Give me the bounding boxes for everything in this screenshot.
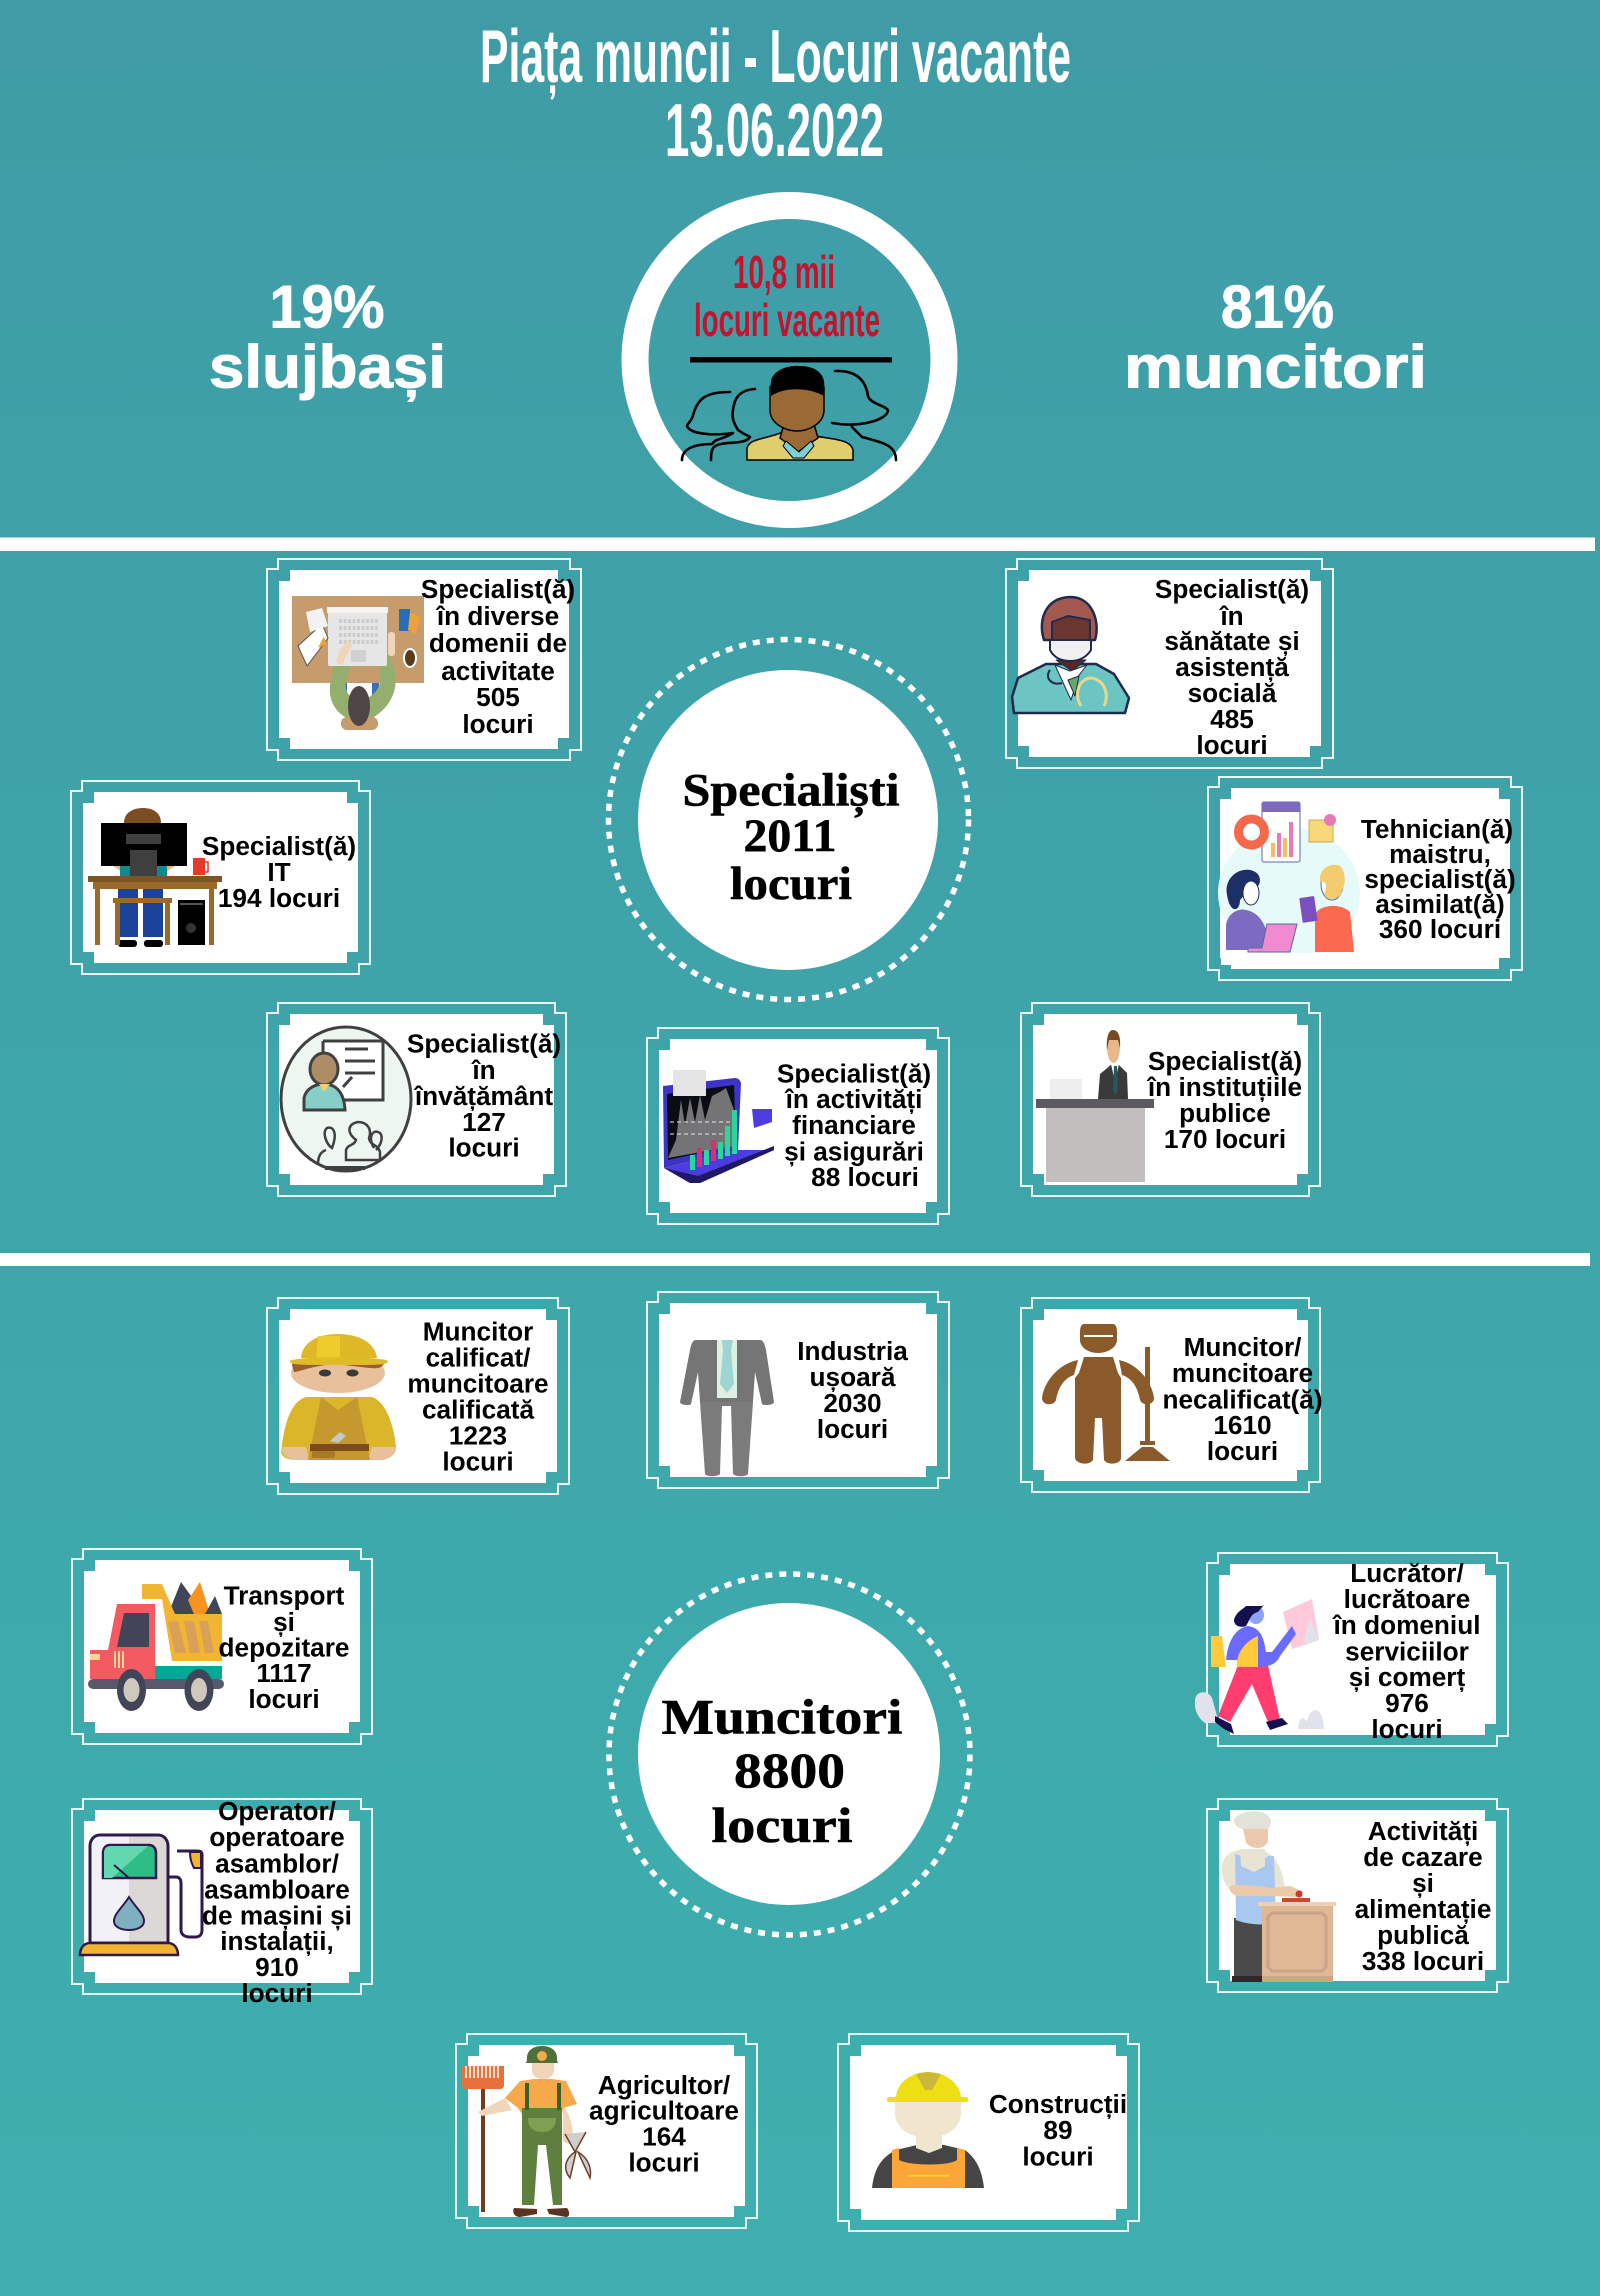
icon: farmer with rake	[462, 2046, 590, 2217]
card: specialist health	[1006, 559, 1333, 768]
label: socială	[1188, 678, 1277, 708]
card: specialist IT	[71, 781, 370, 974]
icon: person at desk from above	[292, 596, 424, 730]
label: alimentație	[1355, 1894, 1491, 1924]
label: în	[470, 1055, 496, 1085]
label: maistru,	[1389, 839, 1491, 869]
icon: chef at counter	[1221, 1811, 1336, 1982]
label: Specialist(ă)	[202, 831, 356, 861]
card: services and commerce	[1195, 1553, 1508, 1746]
label: muncitoare	[1172, 1358, 1313, 1388]
card: specialist education	[267, 1003, 566, 1196]
label: specialist(ă)	[1364, 864, 1516, 894]
label: 88 locuri	[811, 1162, 919, 1192]
label: 505	[476, 682, 520, 712]
stat: 19% slujbași: 19%	[270, 274, 384, 340]
label: Specialist(ă)	[1155, 574, 1309, 604]
specialists total text	[682, 764, 900, 910]
label: sănătate și	[1164, 626, 1300, 656]
label: 1117	[256, 1658, 312, 1688]
icon: walking woman with documents	[1195, 1599, 1324, 1734]
label: Operator/	[218, 1796, 337, 1826]
workers total text: 8800	[734, 1742, 845, 1798]
label: 127	[462, 1107, 506, 1137]
label: și comerț	[1349, 1662, 1465, 1692]
stat: 19% slujbași	[209, 274, 446, 402]
label: activitate	[441, 656, 555, 686]
label: domenii de	[429, 628, 567, 658]
label: Specialist(ă)	[421, 574, 575, 604]
label: calificat/	[426, 1342, 531, 1372]
label: Lucrător/	[1350, 1558, 1464, 1588]
panel: workers circle	[609, 1574, 970, 1935]
title: Piața muncii - Locuri vacante	[480, 14, 1071, 99]
label: locuri	[248, 1684, 320, 1714]
stat: 81% muncitori	[1124, 274, 1427, 400]
label: 976	[1385, 1688, 1429, 1718]
label: locuri	[1371, 1714, 1443, 1744]
icon: clerk at counter	[1036, 1030, 1154, 1182]
icon: grey suit	[680, 1340, 774, 1476]
total vacancies text: 10,8 mii	[733, 246, 835, 298]
card: agriculture	[456, 2034, 757, 2228]
divider: top section	[0, 538, 1595, 551]
icon: dump truck	[88, 1582, 224, 1711]
specialists total text: 2011	[744, 810, 836, 862]
label: instalații,	[220, 1926, 334, 1956]
stat: 81% muncitori: 81%	[1221, 274, 1334, 340]
icon: fuel pump	[80, 1835, 202, 1955]
label: necalificat(ă)	[1162, 1384, 1323, 1414]
card: machine operators	[72, 1796, 372, 2008]
label: Activități	[1368, 1816, 1478, 1846]
label: 2030	[823, 1388, 882, 1418]
workers total text: Muncitori	[662, 1688, 903, 1744]
label: locuri	[241, 1978, 313, 2008]
label: 1610	[1213, 1410, 1272, 1440]
label: Construcții	[989, 2089, 1127, 2119]
label: 338 locuri	[1362, 1946, 1484, 1976]
total vacancies text: locuri vacante	[694, 294, 880, 346]
label: 164	[642, 2122, 686, 2152]
label: serviciilor	[1345, 1636, 1469, 1666]
icon: group of people	[682, 366, 896, 460]
card: construction	[838, 2034, 1139, 2231]
card: unskilled worker	[1021, 1298, 1323, 1492]
label: și asigurări	[784, 1136, 924, 1166]
label: ușoară	[810, 1362, 896, 1392]
card: specialist finance	[647, 1028, 949, 1224]
label: asambloare	[204, 1874, 350, 1904]
label: lucrătoare	[1344, 1584, 1470, 1614]
icon: doctor with mask	[1012, 597, 1129, 713]
icon: teacher in circle	[281, 1027, 411, 1171]
label: 170 locuri	[1164, 1124, 1286, 1154]
label: Specialist(ă)	[1148, 1046, 1302, 1076]
icon: laptop with charts	[663, 1070, 774, 1183]
label: și	[273, 1607, 295, 1637]
label: locuri	[448, 1132, 520, 1162]
label: 360 locuri	[1379, 914, 1501, 944]
label: operatoare	[209, 1822, 345, 1852]
icon: worker with yellow helmet	[281, 1334, 396, 1460]
label: calificată	[422, 1394, 534, 1424]
workers total text	[662, 1688, 903, 1853]
card: technician	[1208, 777, 1522, 980]
label: publică	[1377, 1920, 1469, 1950]
label: financiare	[792, 1110, 916, 1140]
title: 13.06.2022	[665, 88, 884, 172]
card: transport and storage	[72, 1549, 372, 1744]
card: specialist public institutions	[1021, 1003, 1320, 1196]
title	[480, 14, 1071, 172]
label: și	[1412, 1868, 1434, 1898]
label: locuri	[817, 1414, 888, 1444]
card: light industry	[647, 1292, 949, 1488]
label: Specialist(ă)	[407, 1028, 561, 1058]
stat: 81% muncitori: muncitori	[1124, 334, 1427, 400]
label: locuri	[462, 709, 534, 739]
label: 1223	[449, 1420, 507, 1450]
divider: middle section	[0, 1253, 1590, 1266]
label: locuri	[1022, 2142, 1094, 2172]
label: locuri	[1196, 730, 1268, 760]
stat: 19% slujbași: slujbași	[209, 334, 446, 402]
label: Industria	[797, 1336, 908, 1366]
label: Specialist(ă)	[777, 1058, 931, 1088]
label: agricultoare	[589, 2096, 739, 2126]
label: de cazare	[1363, 1842, 1483, 1872]
panel: specialists circle	[608, 640, 968, 1000]
card: accommodation and food	[1207, 1799, 1508, 1992]
label: muncitoare	[407, 1368, 549, 1398]
label: locuri	[1207, 1436, 1278, 1466]
label: în instituțiile	[1146, 1072, 1302, 1102]
specialists total text: Specialiști	[682, 764, 900, 818]
label: asamblor/	[215, 1848, 340, 1878]
label: publice	[1179, 1098, 1271, 1128]
specialists total text: locuri	[730, 858, 852, 910]
total vacancies text	[694, 246, 880, 346]
label: depozitare	[219, 1632, 349, 1662]
label: Agricultor/	[598, 2070, 731, 2100]
icon: team with charts	[1218, 802, 1371, 965]
label: învățământ	[413, 1081, 553, 1111]
label: Muncitor/	[1184, 1332, 1302, 1362]
workers total text: locuri	[712, 1797, 853, 1853]
card: specialist diverse domains	[267, 559, 581, 760]
icon: worker with broom	[1042, 1324, 1170, 1464]
panel: total vacancies circle	[635, 206, 944, 514]
label: 485	[1210, 704, 1254, 734]
label: asimilat(ă)	[1375, 889, 1505, 919]
label: în domeniul	[1332, 1610, 1480, 1640]
card: skilled worker	[267, 1298, 569, 1494]
label: locuri	[442, 1446, 514, 1476]
label: asistență	[1175, 652, 1289, 682]
label: în activități	[784, 1084, 922, 1114]
label: de mașini și	[202, 1900, 352, 1930]
label: Tehnician(ă)	[1361, 814, 1513, 844]
label: 194 locuri	[218, 883, 340, 913]
label: IT	[267, 857, 291, 887]
label: în	[1218, 601, 1244, 631]
icon: construction worker	[872, 2072, 984, 2188]
label: în diverse	[435, 601, 559, 631]
label: Transport	[224, 1580, 345, 1610]
label: locuri	[628, 2148, 700, 2178]
label: 89	[1043, 2115, 1073, 2145]
label: 910	[255, 1952, 299, 1982]
label: Muncitor	[423, 1316, 533, 1346]
icon: person at computer	[88, 808, 222, 947]
